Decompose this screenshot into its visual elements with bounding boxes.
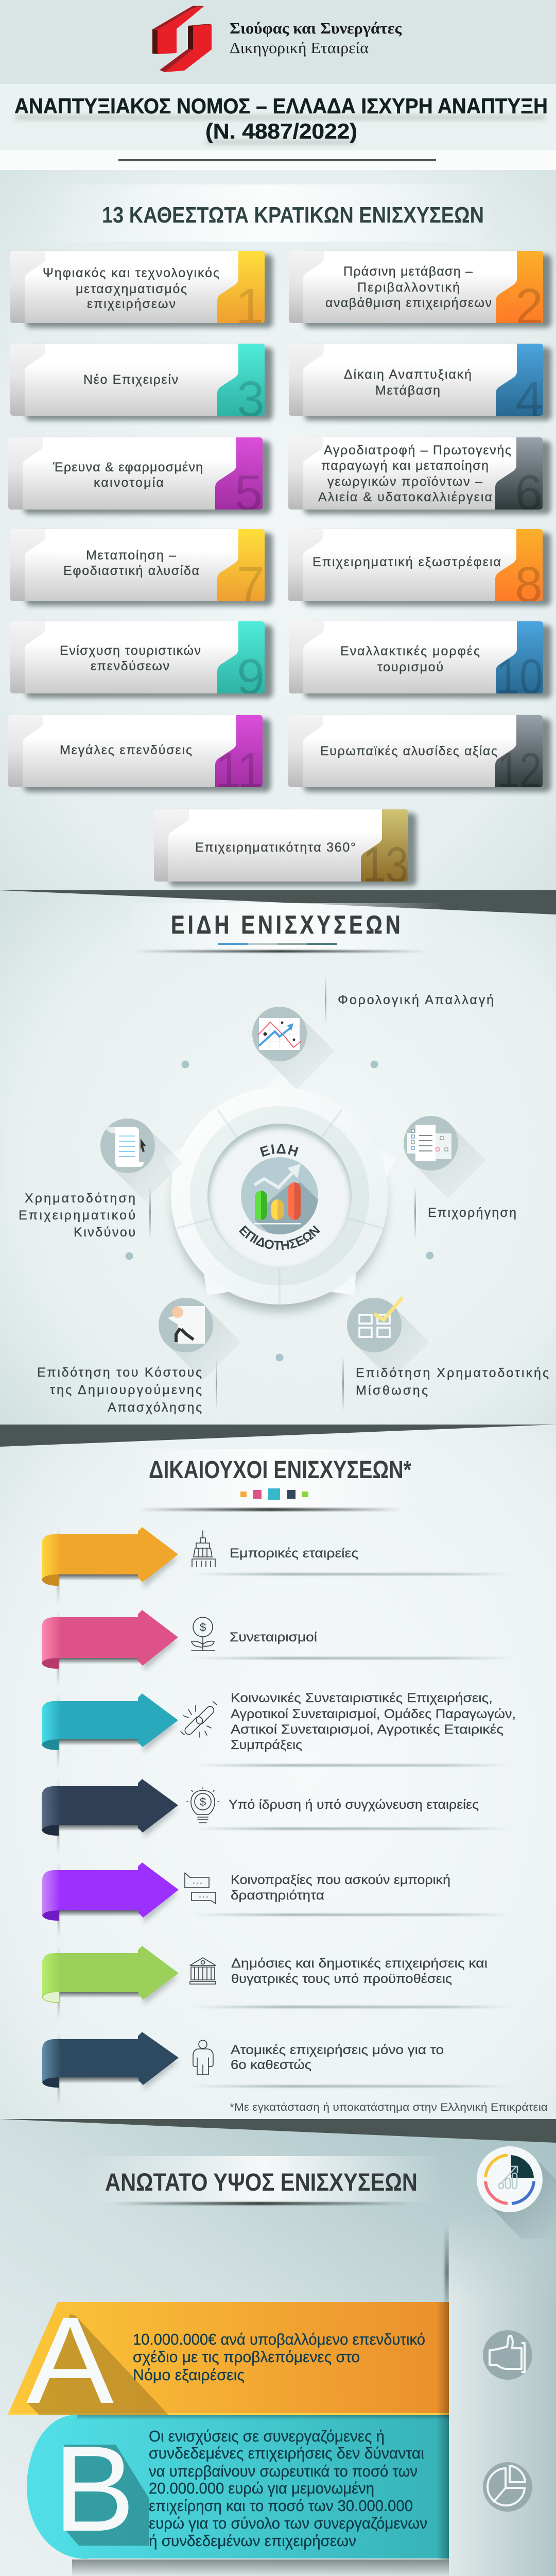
label: tax exemption [325, 975, 494, 1024]
label: leasing subsidy: Επιδότηση Χρηματοδοτικής [356, 1366, 549, 1380]
panel B text: συνδεδεμένες επιχειρήσεις δεν δύνανται [149, 2444, 424, 2462]
card 9 label [60, 643, 201, 673]
section: main title [0, 84, 556, 170]
arrow [42, 1610, 178, 1686]
letter A: Α [26, 2291, 114, 2429]
text: Ατομικές επιχειρήσεις μόνο για το [231, 2043, 444, 2057]
card 11 label: Μεγάλες επενδύσεις [60, 743, 192, 757]
green bar [255, 1191, 267, 1220]
label: venture capital: Κινδύνου [74, 1225, 135, 1240]
card 6 label: Αλιεία & υδατοκαλλιέργεια [318, 490, 492, 504]
text: Συνεταιρισμοί [230, 1630, 317, 1645]
icon: grid with check [347, 1297, 429, 1380]
card 12 [288, 715, 551, 799]
column edge shadow [445, 2226, 449, 2318]
card 5 [8, 437, 271, 521]
arrow [42, 1693, 178, 1768]
letter shadow B [64, 2445, 149, 2546]
section: types of aid [0, 890, 556, 1425]
card 1 label: επιχειρήσεων [87, 297, 176, 311]
tab with number 6: 6 [515, 465, 543, 521]
panel B [27, 2415, 449, 2576]
icon: public building [190, 1958, 216, 1984]
icon: building [192, 1531, 215, 1567]
text: θυγατρικές τους υπό προϋποθέσεις [231, 1972, 452, 1986]
arrow [42, 1946, 179, 2020]
icon: chat bubbles [185, 1873, 216, 1904]
label: employment cost subsidy [37, 1357, 217, 1415]
text: Κοινωνικές Συνεταιριστικές Επιχειρήσεις, [231, 1691, 493, 1705]
label: leasing subsidy: Μίσθωσης [356, 1383, 428, 1398]
tab with number 7: 7 [237, 556, 265, 613]
text: Συμπράξεις [231, 1738, 302, 1752]
icon: person [193, 2040, 213, 2075]
card 13 [154, 809, 416, 893]
panel A [8, 2291, 449, 2429]
icon: money plant [192, 1617, 215, 1651]
card 8 label: Επιχειρηματική εξωστρέφεια [312, 555, 501, 569]
panel B text: επιχείρηση και το ποσό των 30.000.000 [149, 2497, 413, 2515]
title rule [118, 159, 436, 161]
text: Κοινοπραξίες που ασκούν εμπορική [231, 1873, 450, 1887]
heading shadow [113, 2202, 407, 2205]
heading: ΕΙΔΗ ΕΝΙΣΧΥΣΕΩΝ [171, 910, 401, 939]
icon: money plant: $ [200, 1621, 206, 1634]
card 7 label: Εφοδιαστική αλυσίδα [63, 564, 199, 578]
text: Εμπορικές εταιρείες [230, 1546, 358, 1561]
tab with number 8: 8 [515, 556, 543, 613]
tab with number 11: 11 [216, 742, 263, 799]
tab with number 6 [495, 437, 543, 510]
tab with number 11 [215, 715, 263, 799]
card 6 label: παραγωγή και μεταποίηση [321, 459, 489, 473]
panel B text: 20.000.000 ευρώ για μεμονωμένη [149, 2479, 374, 2497]
yellow bar [271, 1199, 284, 1220]
panel B top shadow [77, 2415, 449, 2420]
tab with number 3: 3 [237, 371, 265, 427]
middle ring [190, 1106, 369, 1285]
row 2 [42, 1610, 511, 1686]
panel B text: να υπερβαίνουν σωρευτικά το ποσό των [149, 2462, 418, 2480]
row 5 [42, 1862, 511, 1939]
card 2 label: Πράσινη μετάβαση – [343, 264, 473, 279]
arrow head [287, 1164, 301, 1178]
right column [449, 2210, 556, 2576]
tab with number 9: 9 [237, 649, 265, 705]
tab with number 10: 10 [496, 649, 543, 705]
top dark wedge [0, 890, 556, 914]
panel A text: σχέδιο με τις προβλεπόμενες στο [133, 2348, 360, 2366]
card 10 [289, 621, 551, 705]
icon: running employee [159, 1298, 241, 1380]
section background [0, 2119, 556, 2576]
card 9 label: επενδύσεων [91, 659, 169, 673]
card 11 [8, 715, 271, 799]
heading: ΑΝΩΤΑΤΟ ΥΨΟΣ ΕΝΙΣΧΥΣΕΩΝ [105, 2169, 418, 2196]
label: venture capital: Χρηματοδότηση [25, 1191, 135, 1206]
text [231, 1873, 450, 1903]
icon: thumbs up [483, 2330, 532, 2380]
title band [0, 84, 556, 150]
section: maximum aid [0, 2119, 556, 2576]
row 3 [42, 1691, 516, 1768]
section: 13 aid regimes [0, 170, 556, 893]
card 4 label [344, 367, 472, 398]
card 2 [289, 251, 551, 334]
tab with number 1: 1 [236, 278, 264, 334]
growth arrow [254, 1171, 294, 1188]
heading band [129, 1449, 417, 1508]
card 4 [289, 344, 551, 427]
section: beneficiaries [0, 1425, 556, 2119]
panel B under shadow [72, 2560, 449, 2576]
curved label top: ΕΙΔΗ [259, 1144, 299, 1157]
panel B text: ευρώ για το σύνολο των συνεργαζόμενων [149, 2514, 427, 2532]
card 4 label: Δίκαιη Αναπτυξιακή [344, 367, 472, 382]
icon: chain [181, 1702, 217, 1737]
card 9 [10, 621, 273, 705]
card 10 label: Εναλλακτικές μορφές [340, 644, 480, 658]
icon: chart [252, 1007, 335, 1089]
card 5 label [53, 460, 203, 490]
label: venture capital: Επιχειρηματικού [19, 1208, 135, 1223]
bar baseline [254, 1223, 301, 1224]
text: 6ο καθεστώς [231, 2058, 311, 2072]
panel A bottom highlight [8, 2413, 449, 2415]
title: (Ν. 4887/2022) [205, 119, 357, 143]
title [14, 94, 548, 143]
heading shadow [135, 950, 425, 953]
card 6 label: γεωργικών προϊόντων – [327, 474, 482, 489]
card 7 label [63, 548, 199, 578]
tab with number 7 [217, 529, 265, 601]
card 6 [288, 437, 551, 521]
panel B text [149, 2427, 427, 2550]
panel A text: 10.000.000€ ανά υποβαλλόμενο επενδυτικό [133, 2330, 425, 2348]
top dark wedge [0, 2119, 556, 2143]
card 9 label: Ενίσχυση τουριστικών [60, 643, 201, 658]
arrow [42, 1862, 179, 1939]
title text shadow [15, 115, 546, 144]
card 8 [288, 529, 551, 613]
gear shadow [174, 1100, 385, 1311]
heading band [124, 903, 443, 950]
section background [0, 890, 556, 1429]
header background [0, 0, 556, 84]
panel A shape [8, 2302, 449, 2415]
card 2 label: αναβάθμιση επιχειρήσεων [325, 296, 492, 310]
card 10 label [340, 644, 480, 674]
heading colour bar [218, 943, 337, 945]
text: Αγροτικοί Συνεταιρισμοί, Ομάδες Παραγωγών, [231, 1707, 516, 1721]
panel A text: Νόμο εξαιρέσεις [133, 2366, 245, 2384]
row 1 [42, 1527, 511, 1603]
row 6 [42, 1946, 511, 2020]
footnote: *Με εγκατάσταση ή υποκατάστημα στην Ελληνική Επικράτεια [230, 2102, 548, 2113]
tab with number 3 [217, 344, 265, 416]
heading band [31, 184, 499, 242]
icon: scroll document [100, 1118, 183, 1201]
logo: Sioufas mark [152, 6, 212, 72]
letter shadow A [27, 2314, 168, 2415]
text: δραστηριότητα [231, 1888, 324, 1903]
text: Δημόσιες και δημοτικές επιχειρήσεις και [231, 1956, 488, 1971]
panel B text: ή συνδεδεμένων επιχειρήσεων [149, 2532, 356, 2550]
heading: ΔΙΚΑΙΟΥΧΟΙ ΕΝΙΣΧΥΣΕΩΝ* [149, 1456, 411, 1484]
icon: idea bulb [187, 1788, 219, 1823]
text: Αστικοί Συνεταιρισμοί, Αγροτικές Εταιρικές [231, 1722, 503, 1737]
card 13 label: Επιχειρηματικότητα 360° [195, 840, 356, 855]
letter B: Β [54, 2421, 135, 2557]
gear diagram [166, 1087, 391, 1317]
logo text: Δικηγορική Εταιρεία [230, 39, 369, 57]
card 1 label [43, 266, 219, 311]
tab with number 2 [496, 251, 543, 323]
label: leasing subsidy [342, 1357, 549, 1411]
text [231, 1956, 488, 1986]
arrow [42, 2032, 179, 2105]
card 4 label: Μετάβαση [375, 383, 440, 398]
tab with number 12 [495, 715, 543, 799]
icon: documents [404, 1116, 486, 1198]
white strip under title [0, 150, 556, 170]
logo text: Σιούφας και Συνεργάτες [230, 19, 402, 37]
tab with number 1 [217, 251, 265, 323]
card 7 label: Μεταποίηση – [86, 548, 176, 563]
tab with number 5 [215, 437, 263, 510]
card 1 label: μετασχηματισμός [76, 282, 187, 296]
card 12 label: Ευρωπαϊκές αλυσίδες αξίας [320, 744, 497, 758]
tab with number 8 [495, 529, 543, 613]
tab with number 2: 2 [515, 278, 543, 334]
gear tips [163, 1073, 396, 1295]
inner well [207, 1124, 352, 1269]
bubble long shadow [255, 1182, 329, 1236]
section: header [0, 0, 556, 84]
section background [0, 1425, 556, 2119]
panel A text [133, 2330, 425, 2384]
icon: pie chart [483, 2462, 532, 2512]
text [231, 2043, 444, 2072]
card 6 label [318, 443, 511, 504]
tab with number 12: 12 [497, 742, 542, 799]
curved label bottom: ΕΠΙΔΟΤΗΣΕΩΝ [239, 1225, 320, 1250]
row 4 [42, 1779, 511, 1853]
card 1 [10, 251, 273, 334]
card 3 [10, 344, 273, 427]
panel B bottom line [88, 2558, 449, 2560]
arrow [42, 1527, 178, 1603]
section background [0, 170, 556, 890]
panel B text: Οι ενισχύσεις σε συνεργαζόμενες ή [149, 2427, 385, 2445]
label: tax exemption: Φορολογική Απαλλαγή [338, 993, 494, 1007]
heading squares [240, 1488, 308, 1500]
tab with number 13 [361, 809, 408, 893]
icon: idea bulb: $ [200, 1795, 206, 1808]
card 10 label: τουρισμού [377, 660, 443, 674]
panel B shape [27, 2415, 449, 2559]
tab with number 4: 4 [515, 371, 543, 427]
card 5 label: Έρευνα & εφαρμοσμένη [53, 460, 203, 474]
label: venture capital [19, 1187, 151, 1240]
heading: 13 ΚΑΘΕΣΤΩΤΑ ΚΡΑΤΙΚΩΝ ΕΝΙΣΧΥΣΕΩΝ [102, 202, 484, 228]
heading shadow [139, 1508, 402, 1511]
panel right edge shadow [437, 2302, 449, 2560]
tab with number 5: 5 [235, 465, 263, 521]
centre bubble [241, 1157, 318, 1234]
logo text [230, 19, 402, 57]
label: grant [414, 1187, 516, 1239]
label: grant: Επιχορήγηση [428, 1206, 516, 1220]
label: employment cost subsidy: Απασχόλησης [108, 1400, 202, 1415]
heading band [81, 2156, 443, 2202]
tab with number 10 [496, 621, 543, 705]
card 6 label: Αγροδιατροφή – Πρωτογενής [324, 443, 511, 457]
card 2 label: Περιβαλλοντική [357, 280, 460, 295]
card 3 label: Νέο Επιχειρείν [83, 372, 178, 387]
row 7 [42, 2032, 511, 2105]
tab with number 13: 13 [363, 837, 408, 893]
card 7 [10, 529, 273, 613]
arrow [42, 1779, 178, 1853]
label: employment cost subsidy: της Δημιουργούμενης [50, 1383, 202, 1397]
top dark wedge [0, 1425, 556, 1447]
ring seams [177, 1109, 383, 1304]
connector dots [126, 1060, 433, 1361]
text: Υπό ίδρυση ή υπό συγχώνευση εταιρείες [229, 1798, 479, 1812]
icon: progress dial [477, 2146, 556, 2239]
red bar [288, 1182, 301, 1220]
tab with number 9 [217, 621, 265, 705]
card 1 label: Ψηφιακός και τεχνολογικός [43, 266, 219, 280]
label: employment cost subsidy: Επιδότηση του Κόστους [37, 1365, 202, 1380]
card 5 label: καινοτομία [94, 476, 164, 490]
tab with number 4 [496, 344, 543, 416]
text [231, 1691, 516, 1752]
outer ring [171, 1087, 388, 1304]
card 2 label [325, 264, 492, 310]
